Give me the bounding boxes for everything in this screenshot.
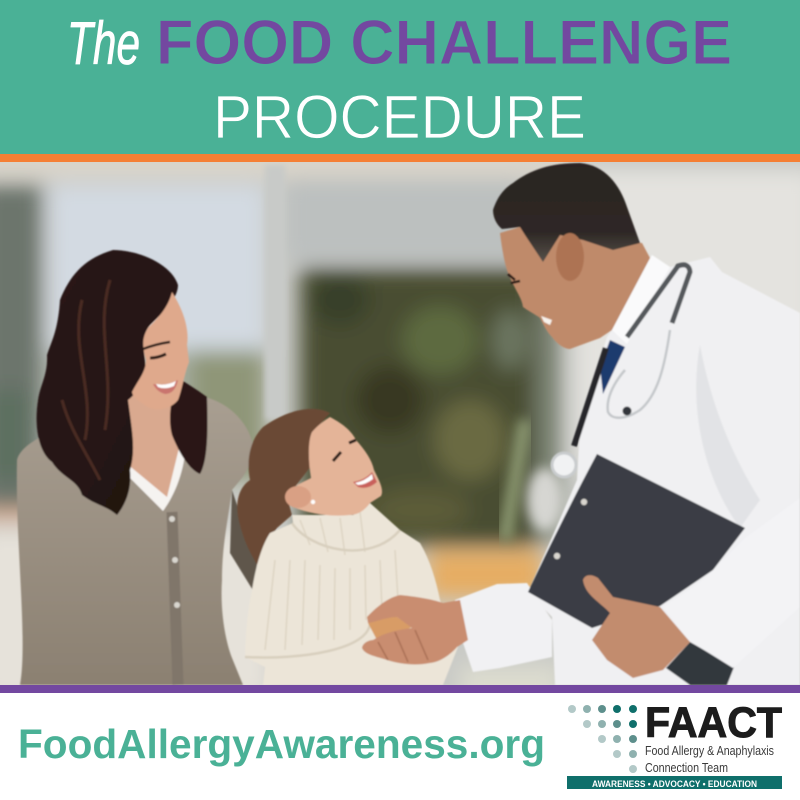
forearm sleeve — [663, 498, 800, 668]
logo wordmark: FAACT — [645, 699, 782, 747]
collar — [612, 255, 670, 344]
doctor hand on clipboard — [583, 575, 690, 678]
tie — [600, 340, 625, 394]
neck and face — [500, 227, 650, 349]
title line one: The — [67, 10, 140, 77]
orange divider — [0, 154, 800, 162]
ponytail and hair — [237, 409, 330, 565]
eye — [150, 354, 166, 358]
logo dot grid — [568, 705, 637, 773]
logo subtitle: Food Allergy & Anaphylaxis — [645, 744, 774, 758]
face — [293, 417, 382, 516]
blurred clinic background — [0, 150, 800, 705]
logo: FAACT — [567, 699, 782, 790]
people — [17, 163, 800, 685]
sweater — [245, 503, 458, 685]
cardigan buttons — [169, 516, 180, 608]
website address: FoodAllergyAwareness.org — [18, 721, 545, 767]
blurred green plant stem — [505, 420, 525, 540]
photo: mother, daughter and doctor shaking hands — [0, 150, 800, 705]
neck and chest — [126, 395, 180, 497]
lab coat torso — [528, 255, 800, 685]
smile — [353, 472, 377, 488]
clipboard rivets — [554, 499, 587, 559]
cardigan — [17, 396, 253, 685]
logo tagline bar — [567, 776, 782, 790]
turtleneck fold — [292, 523, 400, 550]
smile — [153, 380, 178, 394]
smile — [541, 316, 552, 325]
sweater arm fold — [245, 622, 370, 658]
hair — [37, 250, 178, 515]
handshake — [362, 595, 468, 664]
doctor — [455, 163, 800, 685]
girl hand — [368, 616, 412, 642]
teeth — [355, 474, 373, 485]
earring — [311, 500, 315, 504]
title line two: PROCEDURE — [213, 83, 586, 151]
finger lines — [378, 630, 428, 662]
teeth — [156, 381, 176, 388]
pale blurred object by doctor — [527, 468, 563, 532]
header panel — [0, 0, 800, 154]
logo subtitle second line: Connection Team — [645, 761, 728, 775]
eyes — [333, 440, 356, 461]
girl — [237, 409, 458, 685]
cardigan placket — [172, 512, 178, 685]
doctor hand — [362, 595, 468, 664]
right hair lock — [170, 378, 207, 474]
arm seam shading — [696, 345, 760, 528]
brow — [143, 342, 170, 349]
face — [132, 292, 189, 409]
logo tagline bar: AWARENESS • ADVOCACY • EDUCATION — [592, 779, 757, 790]
hair highlight strands — [62, 280, 110, 480]
mother — [17, 250, 257, 685]
white shirt — [128, 449, 186, 512]
clipboard — [528, 454, 745, 628]
clipboard lower corner — [666, 642, 734, 685]
coat sleeve extended to handshake — [455, 583, 552, 672]
brow and eye — [508, 274, 520, 283]
hair — [493, 163, 640, 262]
purple divider — [0, 685, 800, 693]
stethoscope — [552, 265, 690, 477]
far arm shadow — [230, 490, 257, 592]
ear — [285, 486, 311, 508]
ear — [556, 233, 584, 281]
sweater ribbing — [265, 512, 398, 650]
title line one: FOOD CHALLENGE — [156, 8, 732, 78]
